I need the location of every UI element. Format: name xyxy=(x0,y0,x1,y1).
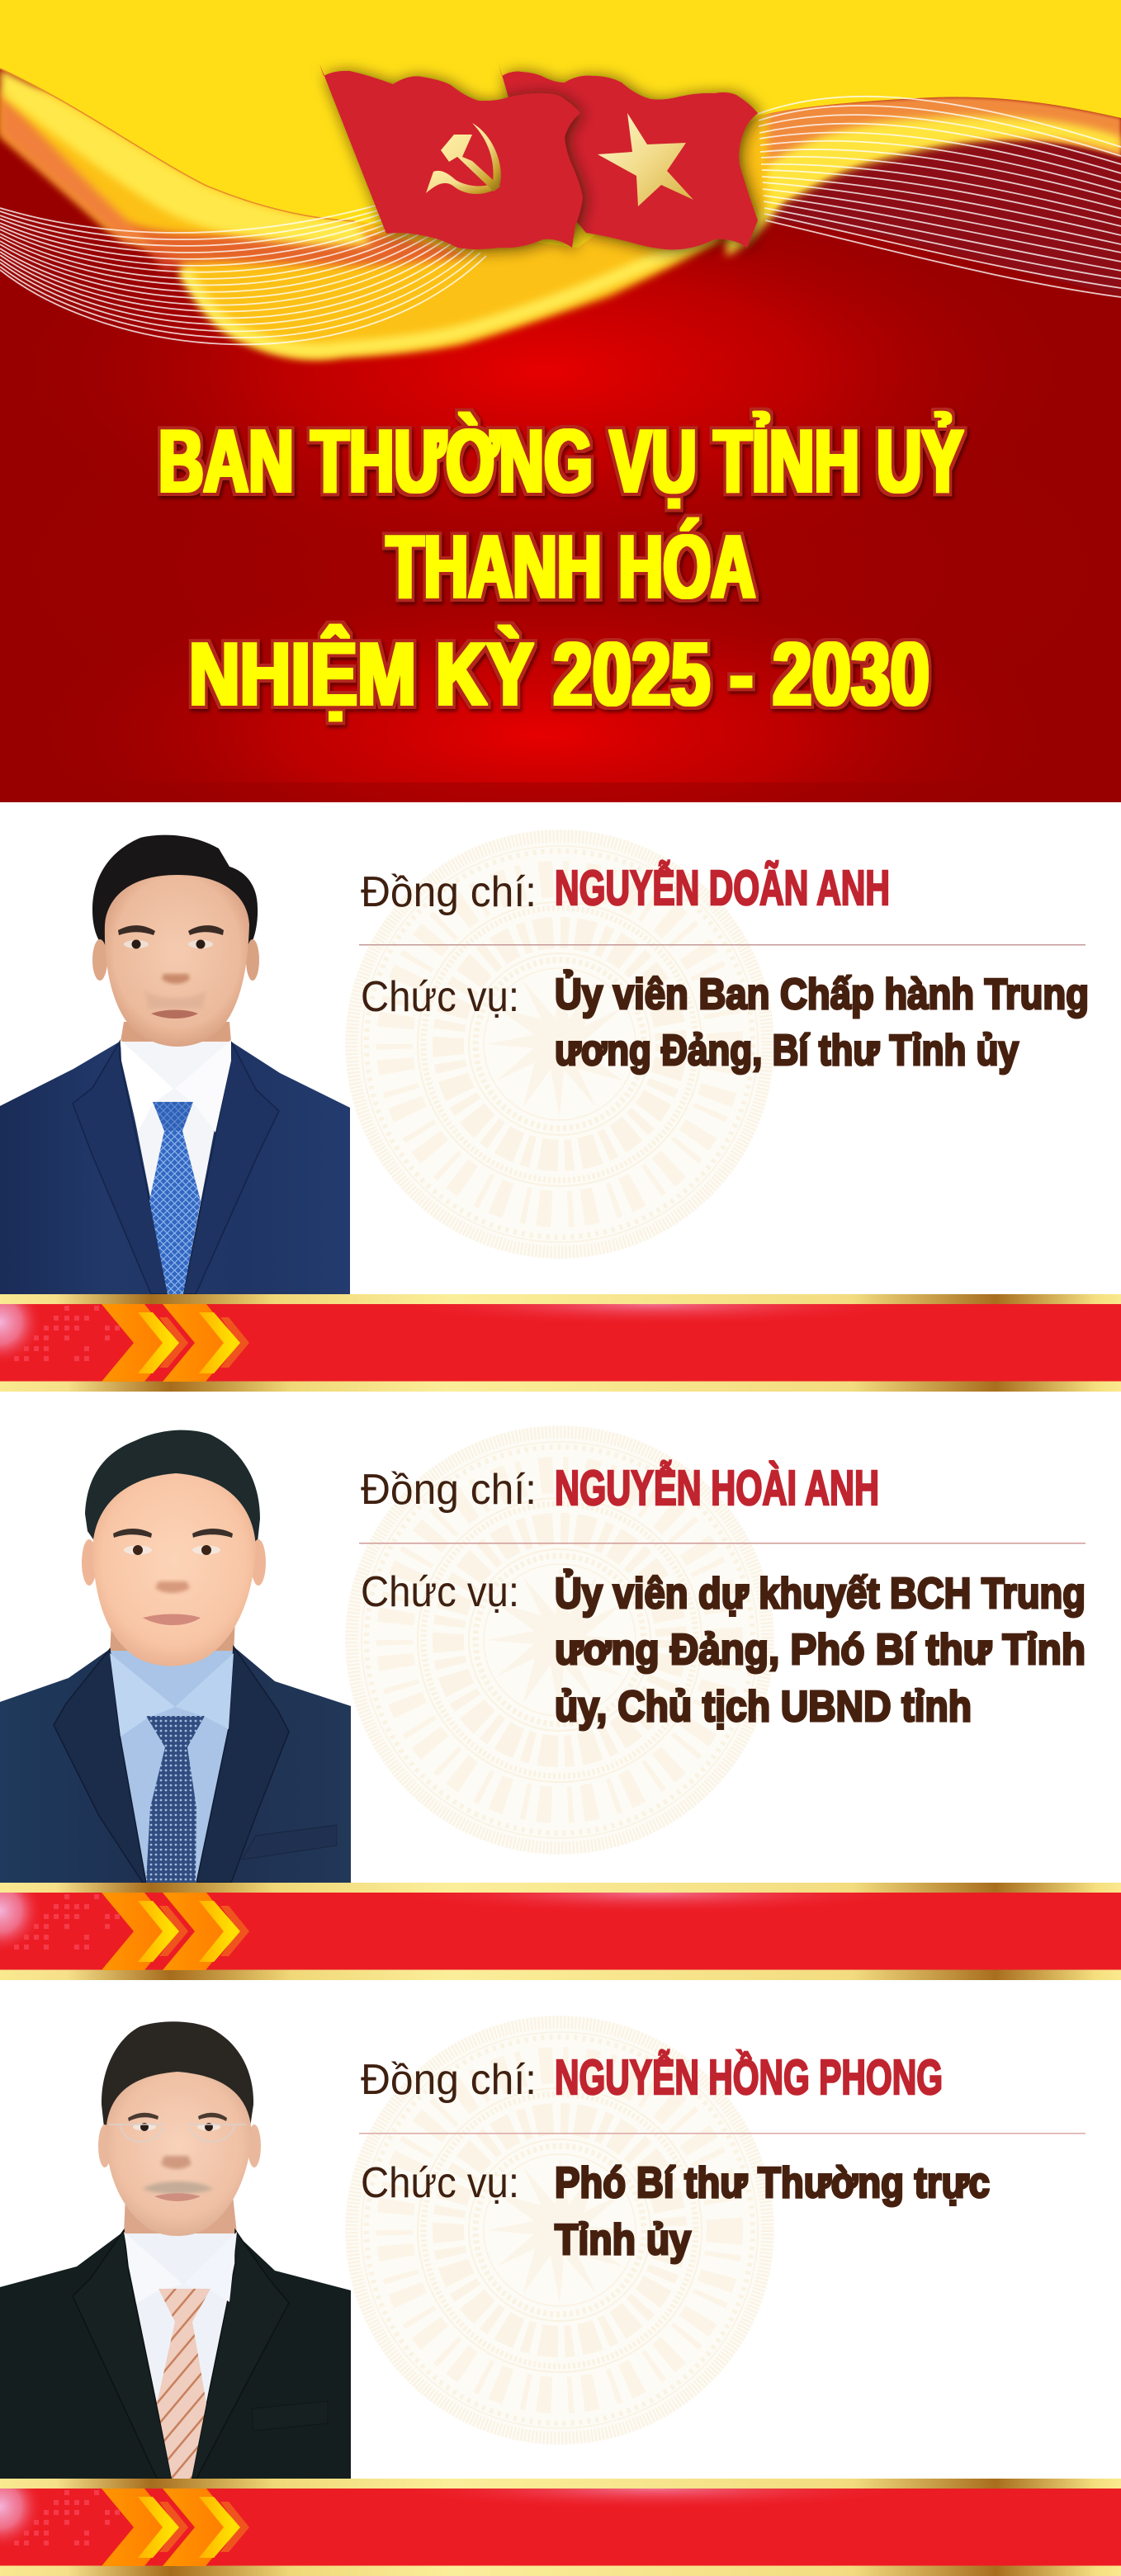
wave: thin orange edge line xyxy=(0,69,355,221)
title: NHIỆM KỲ 2025 - 2030 xyxy=(189,624,929,725)
icon: gold hammer and sickle xyxy=(426,123,501,194)
background: bronze drum motif 1 xyxy=(345,830,774,1259)
panel: profile text Nguyễn Hồng Phong: Tỉnh ủy xyxy=(555,2216,691,2264)
wave: left yellow strip xyxy=(0,69,371,245)
panel: header banner xyxy=(0,0,1121,891)
title xyxy=(158,410,963,725)
panel: profile text Nguyễn Doãn Anh: NGUYỄN DOÃN ANH xyxy=(555,860,890,915)
panel: profile text Nguyễn Doãn Anh: Chức vụ: xyxy=(361,973,519,1021)
panel: profile text Nguyễn Hoài Anh: ương Đảng, Phó Bí thư Tỉnh xyxy=(555,1626,1086,1674)
flag: Party flag xyxy=(319,64,583,249)
ribbon divider 3 xyxy=(0,2467,1121,2576)
wave lines: left white lines xyxy=(0,205,486,344)
background: bronze drum motif 3 xyxy=(345,2016,774,2445)
panel: profile text Nguyễn Doãn Anh: ương Đảng, Bí thư Tỉnh ủy xyxy=(555,1027,1019,1075)
wave: inner red-orange patch xyxy=(124,223,471,272)
wave: right orange band xyxy=(761,97,1121,207)
panel: profile text Nguyễn Hoài Anh: NGUYỄN HOÀI ANH xyxy=(555,1460,879,1515)
glasses xyxy=(109,2125,246,2142)
panel: profile text Nguyễn Hồng Phong: NGUYỄN HỒNG PHONG xyxy=(555,2049,943,2105)
wave: right dark red band xyxy=(743,140,1121,297)
wave: right yellow glow band xyxy=(726,116,1121,256)
pocket xyxy=(252,2401,328,2431)
panel: profile text Nguyễn Hoài Anh: Chức vụ: xyxy=(361,1568,519,1616)
panel: profile text Nguyễn Hồng Phong: Chức vụ: xyxy=(361,2159,519,2207)
panel: profile text Nguyễn Doãn Anh: Đồng chí: xyxy=(361,868,537,916)
panel: profile text Nguyễn Hoài Anh xyxy=(359,1460,1086,1731)
wave: left orange strip xyxy=(0,93,157,248)
wave: central sweep bright edge xyxy=(183,231,715,351)
panel: profile text Nguyễn Hoài Anh: ủy, Chủ tịch UBND tỉnh xyxy=(555,1683,972,1731)
wave: top yellow field xyxy=(0,0,1121,248)
panel: profile text Nguyễn Hồng Phong: Đồng chí: xyxy=(361,2056,537,2104)
icon: gold star xyxy=(598,113,693,206)
portrait: Nguyễn Hoài Anh xyxy=(0,1430,351,1883)
background: bronze drum motif 2 xyxy=(345,1425,774,1855)
panel: profile text Nguyễn Hoài Anh: Đồng chí: xyxy=(361,1466,537,1514)
title: THANH HÓA xyxy=(386,517,755,617)
pocket xyxy=(242,1825,337,1860)
portrait: Nguyễn Doãn Anh xyxy=(0,835,350,1294)
ribbon divider 2 xyxy=(0,1871,1121,1980)
panel: profile text Nguyễn Hồng Phong: Phó Bí thư Thường trực xyxy=(555,2159,990,2207)
panel: profile text Nguyễn Hồng Phong xyxy=(359,2049,1086,2264)
wave lines: right white lines xyxy=(758,97,1121,297)
wave: central yellow sweep xyxy=(0,83,768,359)
flag: Vietnam national flag xyxy=(499,64,758,249)
panel: profile text Nguyễn Doãn Anh xyxy=(359,860,1089,1075)
ribbon divider 1 xyxy=(0,1283,1121,1392)
portrait: Nguyễn Hồng Phong xyxy=(0,2021,351,2479)
